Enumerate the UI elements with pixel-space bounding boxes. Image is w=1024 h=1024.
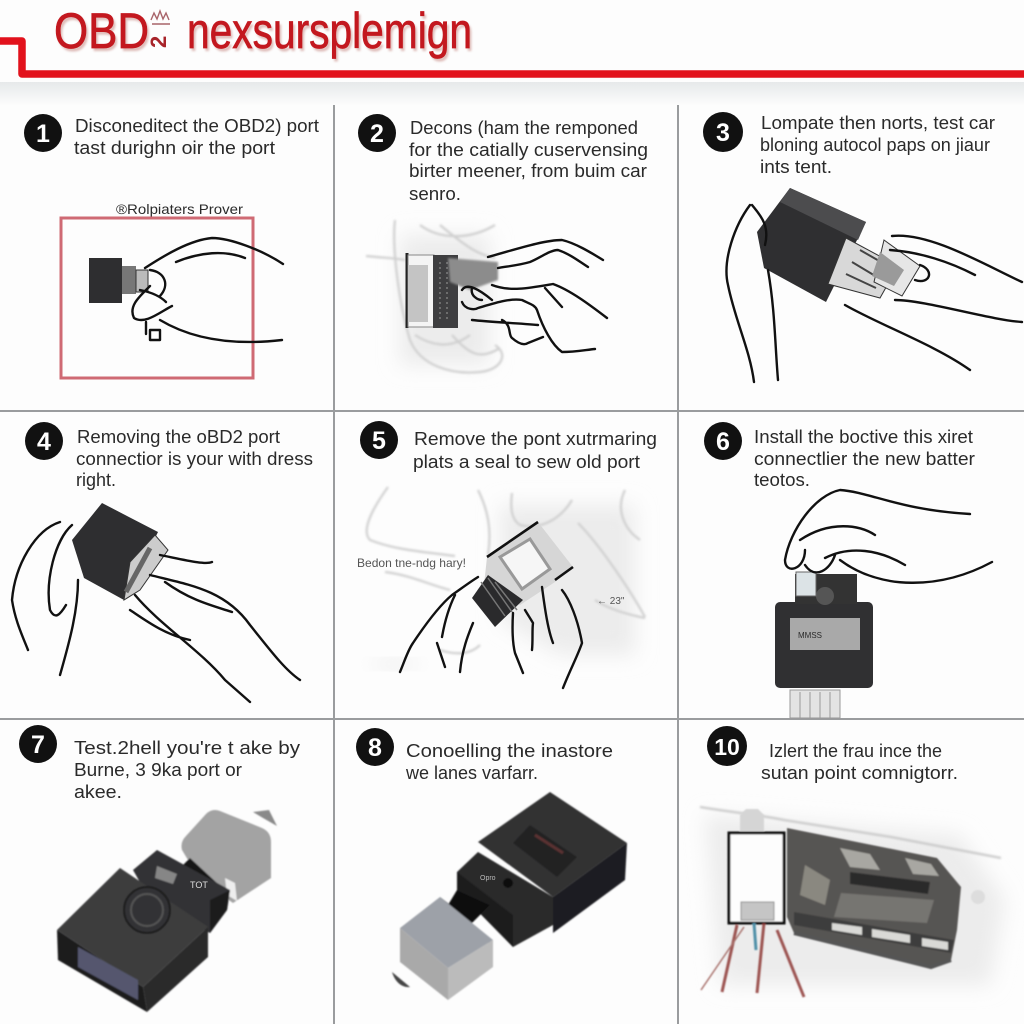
text: step 2: Decons (ham the remponed	[410, 117, 638, 138]
illustration: step 5	[367, 487, 645, 688]
panel: step 6	[704, 422, 992, 718]
panel: step 5	[357, 421, 657, 688]
panel: step 3	[703, 112, 1022, 382]
badge: step 3	[703, 112, 743, 152]
badge: step 3: 3	[716, 119, 730, 147]
text: step 3: Lompate then norts, test car	[761, 112, 995, 133]
text: step 7: Test.2hell you're t ake by	[74, 737, 301, 758]
text: step 8: we lanes varfarr.	[405, 762, 538, 783]
text: step 6	[754, 426, 975, 490]
illustration: step 4	[12, 503, 300, 702]
badge: step 5: 5	[372, 427, 386, 455]
illustration: step 7	[57, 810, 277, 1012]
text: step 4: right.	[76, 469, 116, 490]
label: step 5: Bedon tne-ndg hary!	[357, 556, 466, 570]
text: step 3: ints tent.	[760, 156, 832, 177]
text: step 8: Conoelling the inastore	[406, 740, 613, 761]
badge: step 10	[707, 726, 747, 766]
panel: step 7	[19, 725, 301, 1012]
text: step 2	[409, 117, 648, 204]
text: step 5	[413, 428, 657, 472]
text: step 6: Install the boctive this xiret	[754, 426, 973, 447]
text: step 1: Disconeditect the OBD2) port	[75, 115, 319, 136]
title rule	[0, 41, 1024, 74]
text: step 10: Izlert the frau ince the	[769, 740, 942, 761]
badge: step 4	[25, 422, 63, 460]
title: 2	[146, 36, 171, 48]
illustration: step 8: Opro	[480, 875, 496, 882]
text: step 2: birter meener, from buim car	[409, 160, 647, 181]
badge: step 7: 7	[31, 731, 45, 759]
panel: step 10	[700, 726, 1005, 997]
text: step 3: bloning autocol paps on jiaur	[760, 134, 990, 155]
text: step 2: senro.	[409, 183, 461, 204]
badge: step 4: 4	[37, 428, 51, 456]
label: arrow note: ← 23"	[597, 596, 625, 607]
title: OBD	[56, 6, 151, 62]
text: step 4	[76, 426, 313, 490]
text: step 5: Remove the pont xutrmaring	[414, 428, 657, 449]
text: step 6: teotos.	[754, 469, 810, 490]
badge: step 6: 6	[716, 428, 730, 456]
text: step 3	[760, 112, 995, 177]
badge: step 5	[360, 421, 398, 459]
badge: step 10: 10	[714, 734, 740, 760]
badge: step 8	[356, 728, 394, 766]
badge: step 2: 2	[370, 120, 384, 148]
text: step 1: tast durighn oir the port	[74, 137, 275, 158]
badge: step 2	[358, 114, 396, 152]
label: step 1: ®Rolpiaters Prover	[116, 201, 243, 217]
title: nexsursplemign	[187, 3, 472, 59]
illustration: step 10	[700, 807, 1005, 997]
panel: step 8	[356, 728, 627, 1000]
text: step 7: Burne, 3 9ka port or	[74, 759, 242, 780]
text: step 10	[761, 740, 958, 783]
illustration: step 6: MMSS	[798, 631, 822, 640]
text: step 1	[74, 115, 319, 158]
text: step 5: plats a seal to sew old port	[413, 451, 640, 472]
illustration: step 7: TOT	[190, 880, 208, 890]
text: step 2: for the catially cuservensing	[409, 139, 648, 160]
text: step 7	[74, 737, 301, 802]
illustration: step 8	[392, 792, 627, 1000]
title: OBD	[54, 3, 149, 59]
panel: step 2	[358, 114, 648, 373]
badge: step 8: 8	[368, 734, 382, 762]
illustration: step 6	[775, 490, 992, 718]
text: step 7: akee.	[74, 781, 122, 802]
text: step 4: connectior is your with dress	[76, 448, 313, 469]
text: step 10: sutan point comnigtorr.	[761, 762, 958, 783]
text: step 8	[405, 740, 613, 783]
text: step 4: Removing the oBD2 port	[77, 426, 280, 447]
badge: step 6	[704, 422, 742, 460]
illustration: step 3	[727, 188, 1022, 382]
illustration: step 2	[366, 220, 607, 373]
illustration: step 1	[61, 218, 283, 378]
title	[54, 3, 474, 62]
badge: step 1: 1	[36, 120, 50, 148]
panel: step 4	[12, 422, 313, 702]
panel: step 1	[24, 114, 319, 378]
title: nexsursplemign	[189, 6, 474, 62]
text: step 6: connectlier the new batter	[754, 448, 975, 469]
badge: step 7	[19, 725, 57, 763]
badge: step 1	[24, 114, 62, 152]
